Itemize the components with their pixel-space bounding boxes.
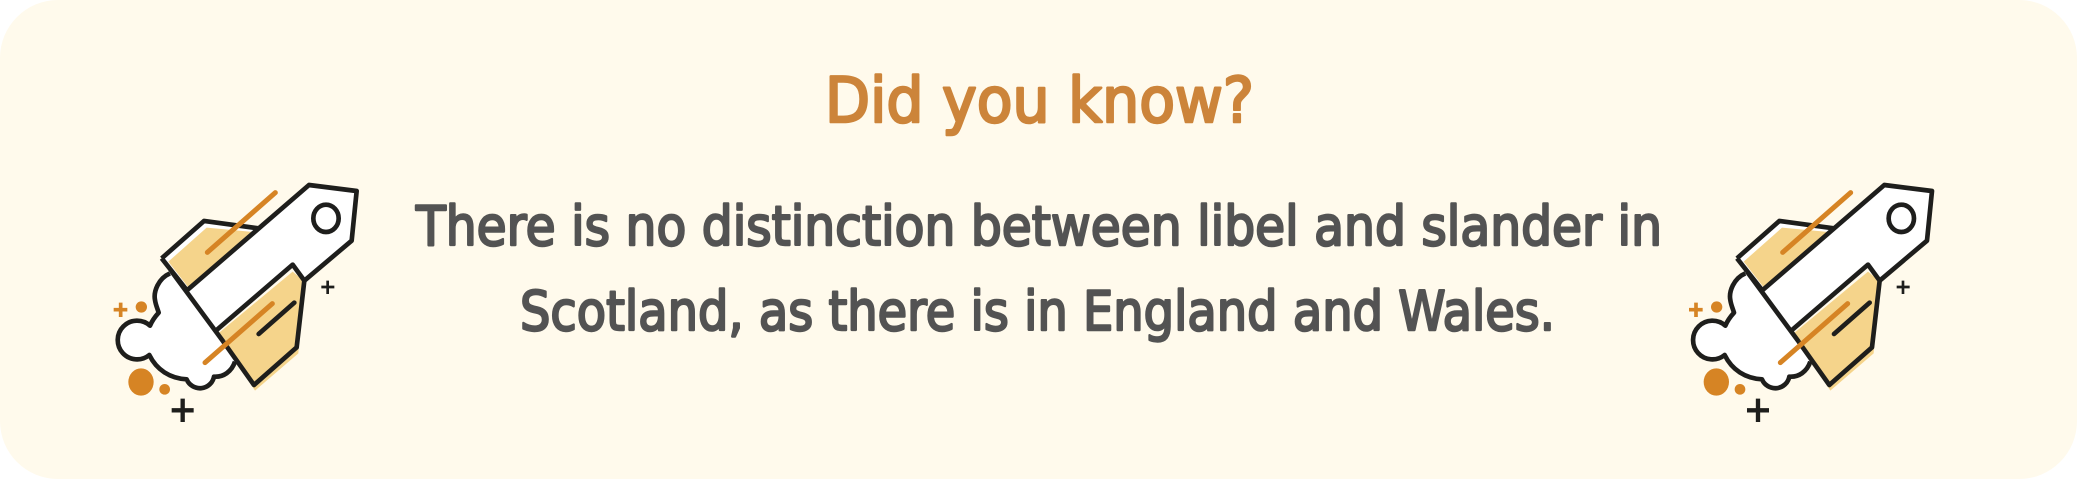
icon: rocket left [114,185,357,422]
title: Did you know? [825,64,1254,137]
icon: rocket right [1689,185,1932,422]
body text: There is no distinction between libel and slander in [415,195,1662,258]
body text [415,195,1662,343]
body text: Scotland, as there is in England and Wales. [520,280,1555,343]
